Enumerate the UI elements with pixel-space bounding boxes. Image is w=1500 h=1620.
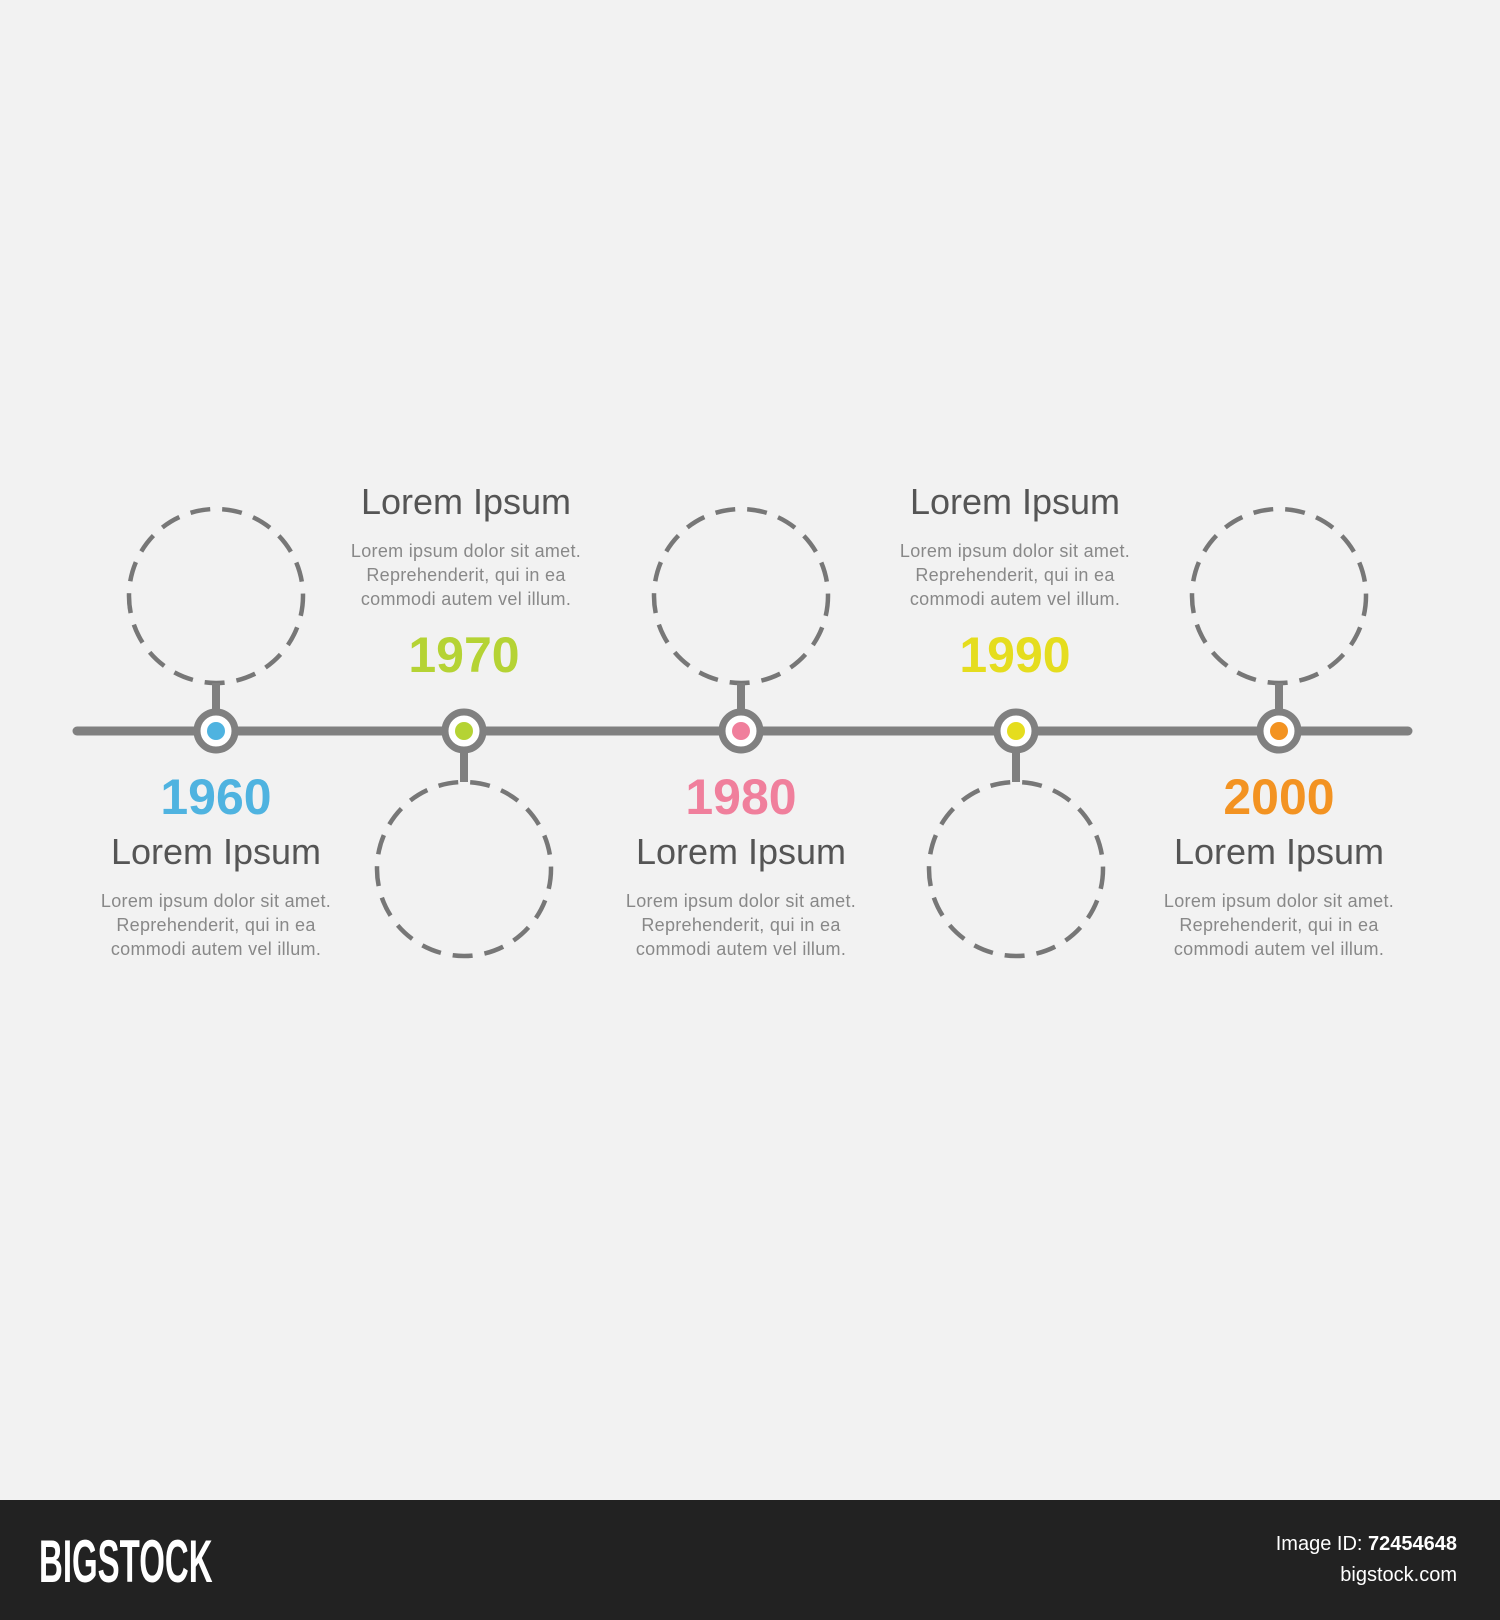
node 1990 bbox=[997, 712, 1035, 750]
dashed circle top 2000 bbox=[1192, 509, 1366, 683]
footer url: bigstock.com bbox=[1340, 1564, 1457, 1586]
milestone 2000 bbox=[1164, 509, 1394, 959]
year 1990: 1990 bbox=[959, 627, 1071, 683]
body 1960: Reprehenderit, qui in ea bbox=[116, 915, 316, 935]
body 1970: Reprehenderit, qui in ea bbox=[366, 565, 566, 585]
body 1990: Reprehenderit, qui in ea bbox=[915, 565, 1115, 585]
footer image id: Image ID: 72454648 bbox=[1276, 1533, 1457, 1555]
dashed circle bottom 1990 bbox=[929, 782, 1103, 956]
year 1970: 1970 bbox=[408, 627, 520, 683]
heading 1960: Lorem Ipsum bbox=[111, 831, 321, 872]
milestone 1970 bbox=[351, 481, 581, 956]
node 1970 bbox=[445, 712, 483, 750]
heading 2000: Lorem Ipsum bbox=[1174, 831, 1384, 872]
timeline axis bbox=[77, 726, 1408, 736]
heading 1980: Lorem Ipsum bbox=[636, 831, 846, 872]
body 1980: Reprehenderit, qui in ea bbox=[641, 915, 841, 935]
milestone 1960 bbox=[101, 509, 331, 959]
body 1990: Lorem ipsum dolor sit amet. bbox=[900, 541, 1130, 561]
node 2000 bbox=[1260, 712, 1298, 750]
body 1960: Lorem ipsum dolor sit amet. bbox=[101, 891, 331, 911]
footer bar bbox=[0, 1500, 1500, 1620]
body 2000: Lorem ipsum dolor sit amet. bbox=[1164, 891, 1394, 911]
body 2000: Reprehenderit, qui in ea bbox=[1179, 915, 1379, 935]
year 1980: 1980 bbox=[685, 769, 797, 825]
footer logo: BIGSTOCK bbox=[39, 1529, 213, 1596]
dashed circle top 1960 bbox=[129, 509, 303, 683]
node 1960 bbox=[197, 712, 235, 750]
heading 1970: Lorem Ipsum bbox=[361, 481, 571, 522]
body 1970: Lorem ipsum dolor sit amet. bbox=[351, 541, 581, 561]
node 1980 bbox=[722, 712, 760, 750]
year 1960: 1960 bbox=[160, 769, 272, 825]
body 1980: Lorem ipsum dolor sit amet. bbox=[626, 891, 856, 911]
body 1960: commodi autem vel illum. bbox=[111, 939, 321, 959]
heading 1990: Lorem Ipsum bbox=[910, 481, 1120, 522]
body 1970: commodi autem vel illum. bbox=[361, 589, 571, 609]
dashed circle bottom 1970 bbox=[377, 782, 551, 956]
milestone 1990 bbox=[900, 481, 1130, 956]
body 1990: commodi autem vel illum. bbox=[910, 589, 1120, 609]
body 2000: commodi autem vel illum. bbox=[1174, 939, 1384, 959]
milestone 1980 bbox=[626, 509, 856, 959]
dashed circle top 1980 bbox=[654, 509, 828, 683]
year 2000: 2000 bbox=[1223, 769, 1335, 825]
body 1980: commodi autem vel illum. bbox=[636, 939, 846, 959]
